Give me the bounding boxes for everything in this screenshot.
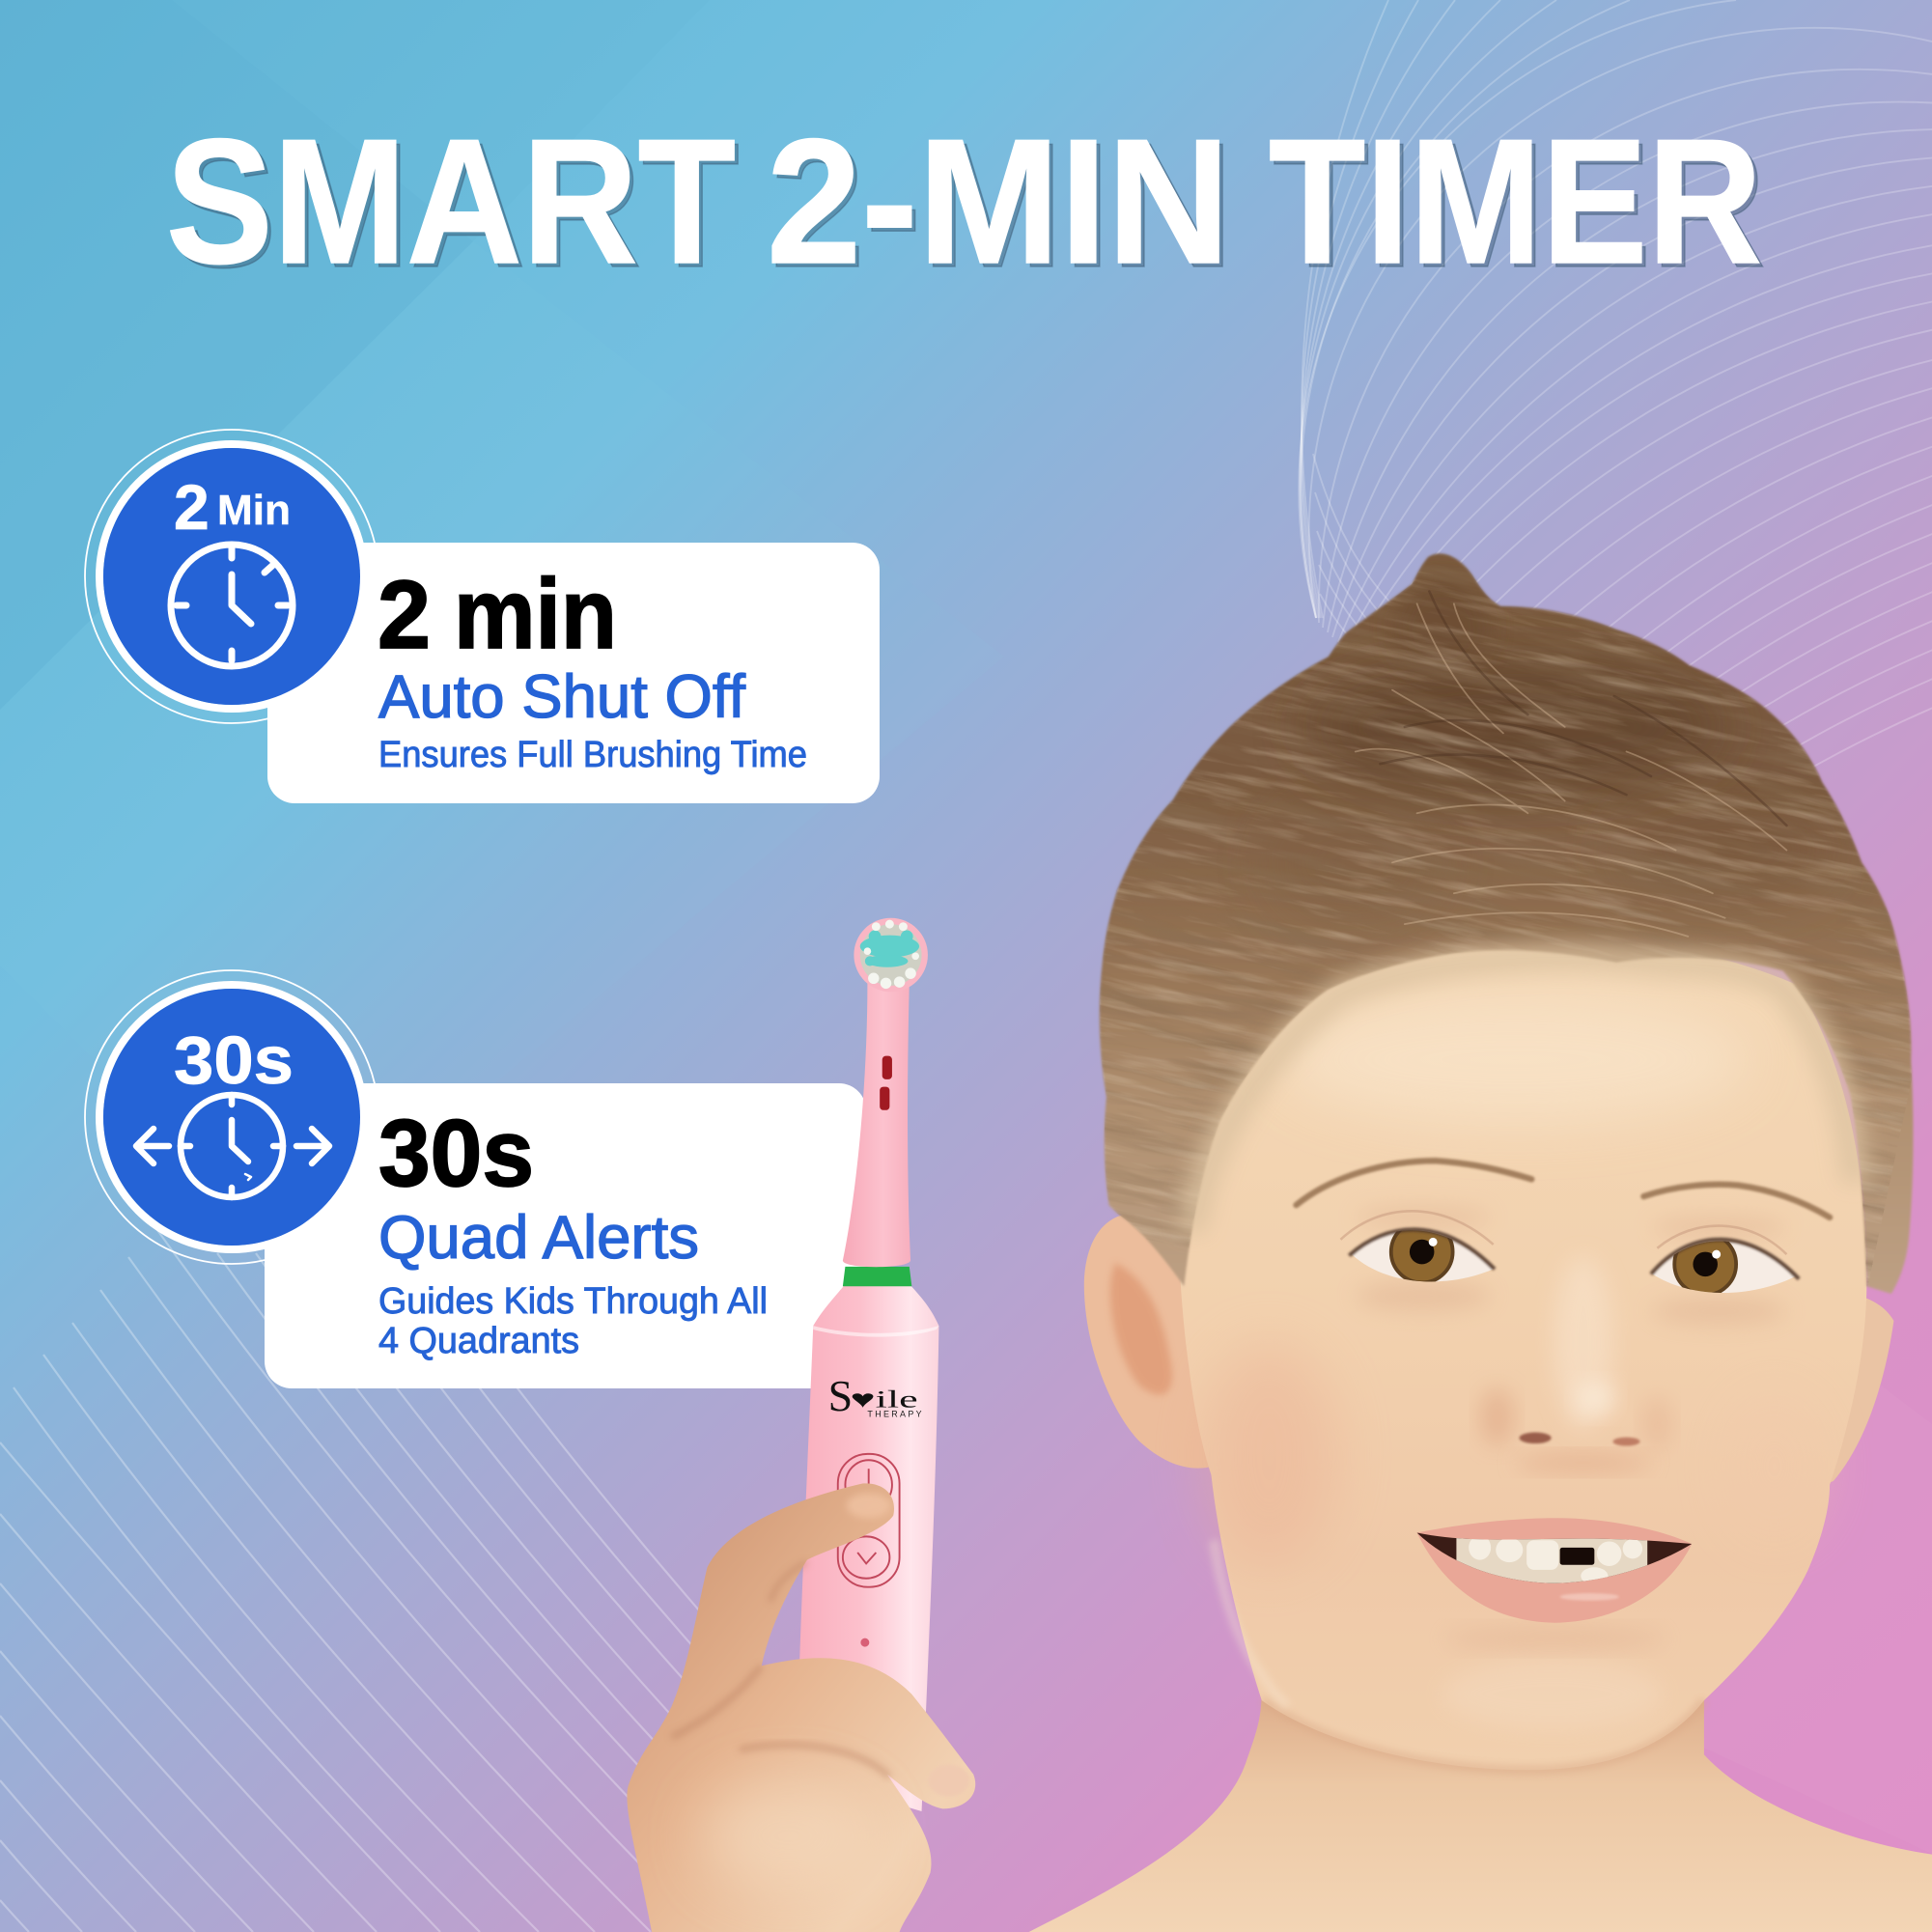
- panel: 2 min auto shut off: [85, 430, 880, 803]
- hair: [1098, 551, 1915, 1295]
- right eye: [1651, 1226, 1799, 1295]
- left ear: [1084, 1214, 1214, 1469]
- badge disc: [103, 989, 360, 1246]
- title: SMART: [170, 105, 740, 304]
- stat: 30s: 30s: [378, 1100, 534, 1206]
- badge label: 30s: [174, 1022, 294, 1098]
- badge disc: [103, 448, 360, 705]
- badge rings: [85, 430, 378, 723]
- brush head: [854, 918, 928, 992]
- face: [1177, 938, 1866, 1770]
- title: SMART: [166, 101, 736, 300]
- left eye: [1340, 1211, 1495, 1282]
- hairline fade: [1192, 957, 1856, 1232]
- photo: boy: [1014, 463, 1932, 1932]
- background curved lines: [1299, 0, 1932, 956]
- right ear: [1831, 1298, 1894, 1482]
- neck and shoulders: [1029, 1688, 1932, 1932]
- red indicator slots: [880, 1056, 892, 1110]
- badge label: 2: [174, 471, 210, 543]
- control buttons: [838, 1454, 900, 1587]
- heading: auto shut off: Auto Shut Off: [378, 663, 745, 731]
- stat: 2 min: min: [454, 558, 617, 669]
- description: 4 Quadrants: [378, 1321, 579, 1361]
- brand logo: THERAPY: [867, 1410, 922, 1419]
- eye sockets shadow: [1356, 1208, 1786, 1325]
- photo: hand: [627, 1483, 975, 1932]
- card: [265, 1083, 866, 1388]
- stat: 2 min: 2: [378, 561, 431, 669]
- title: TIMER: [1269, 101, 1762, 300]
- brush neck: [843, 983, 910, 1267]
- face shading: [1201, 998, 1824, 1770]
- hand shape: [627, 1483, 975, 1932]
- mouth: [1417, 1518, 1692, 1651]
- icon: clock: [171, 545, 293, 666]
- description: Ensures Full Brushing Time: [378, 735, 807, 775]
- stat: 2 min: [378, 558, 617, 669]
- icon: clock with arrows: [136, 1095, 329, 1197]
- card: [267, 543, 880, 803]
- title: [166, 101, 1766, 304]
- brand logo: S: [828, 1371, 853, 1420]
- description: [378, 1281, 768, 1361]
- handle collar highlight: [813, 1326, 938, 1337]
- hair strands: [1356, 603, 1786, 937]
- title: 2-MIN: [767, 101, 1230, 300]
- finger pad: [847, 1494, 891, 1518]
- description: Guides Kids Through All: [378, 1281, 768, 1322]
- eyebrows: [1297, 1161, 1830, 1218]
- brush handle: [796, 1284, 938, 1811]
- badge label: Min: [217, 487, 291, 534]
- panel: 30s quad alerts: [85, 970, 866, 1388]
- indicator dot: [860, 1638, 869, 1647]
- nose: [1480, 1382, 1672, 1472]
- fingernail: [928, 1764, 969, 1797]
- photo: toothbrush: [796, 918, 938, 1811]
- brand logo: ♥ile: [851, 1385, 918, 1413]
- heading: quad alerts: Quad Alerts: [378, 1204, 699, 1272]
- knuckle highlight: [702, 1780, 875, 1891]
- background diagonal lines: [0, 1230, 699, 1932]
- badge rings: [85, 970, 378, 1264]
- brand logo: [828, 1371, 922, 1420]
- green ring: [843, 1267, 911, 1286]
- title: 2-MIN: [770, 105, 1234, 304]
- badge label: [174, 471, 291, 543]
- finger shading: [672, 1562, 889, 1777]
- title: TIMER: [1273, 105, 1766, 304]
